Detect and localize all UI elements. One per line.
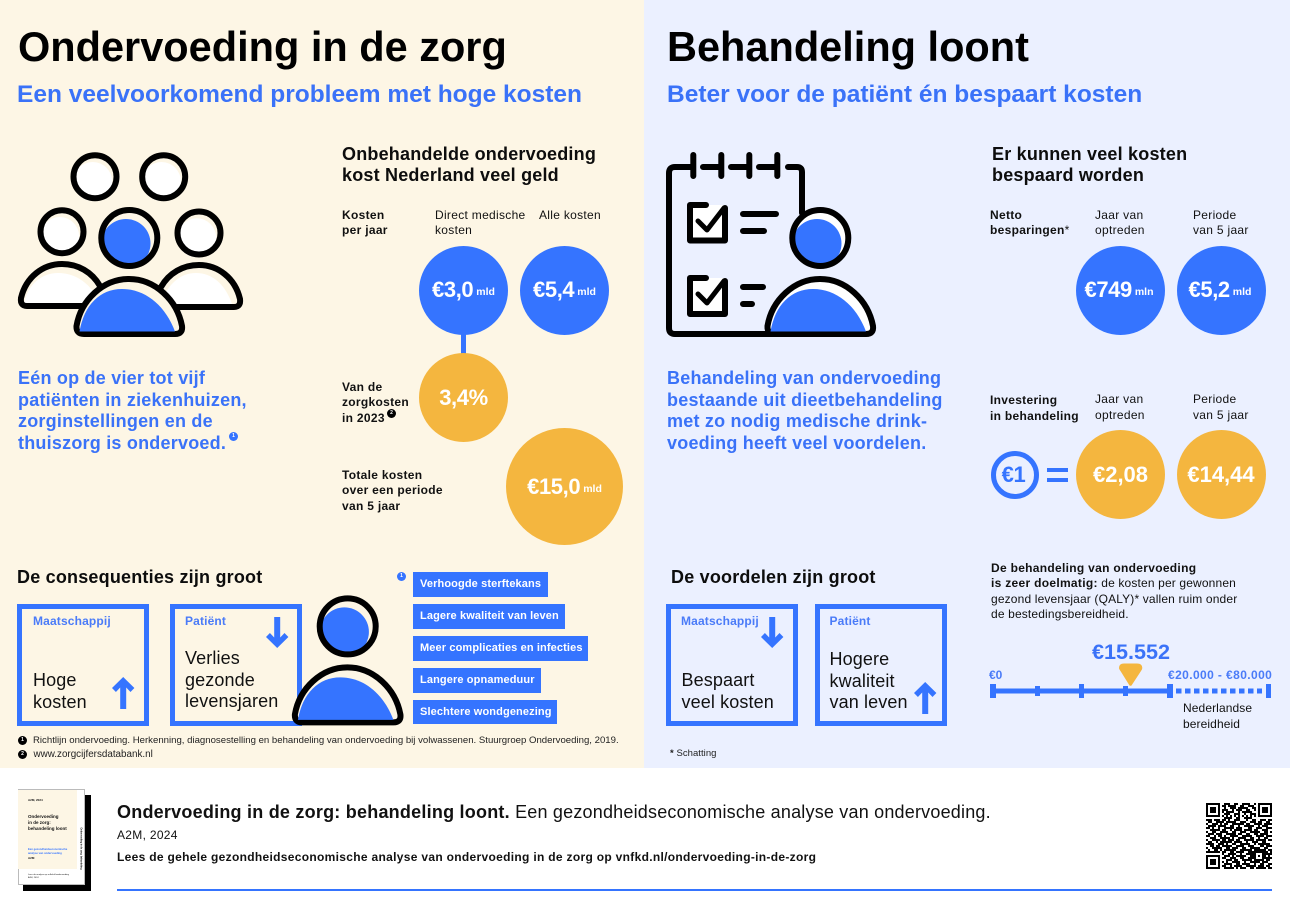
label: totale kosten: van 5 jaar [342,499,400,513]
footnote marker 1 [229,432,238,441]
bubble: 5,4 mld [520,246,609,335]
report cover: Een gezondheidseconomische [28,848,67,851]
card: maatschappij right [666,604,798,726]
footnote marker 1 at tags [397,572,406,581]
label: totale kosten [342,468,443,513]
label: van de zorgkosten: zorgkosten [342,395,409,409]
label: kosten per jaar: per jaar [342,223,388,237]
connector [461,330,466,358]
title: right: Behandeling loont [667,23,1029,70]
bubble: 15,0 mld: mld [583,482,602,494]
label: periode van 5 jaar: van 5 jaar [1193,223,1249,237]
tag list: Meer complicaties en infecties [420,642,583,654]
icon: euro 1 [991,451,1039,499]
card: patiënt right: Hogere [830,649,889,669]
text: left lead paragraph: Eén op de vier tot vijf [18,368,205,388]
bubble: 14,44: €14,44 [1187,462,1255,486]
label: van de zorgkosten [342,380,409,425]
icon: euro 1: €1 [1002,462,1025,487]
scale chart: bereidheid [1183,717,1240,731]
card: maatschappij left: kosten [33,692,87,712]
bubble: 5,2 mld [1176,246,1266,335]
icon: group of people [18,152,244,337]
label: totale kosten: Totale kosten [342,468,422,482]
heading: besparing: Er kunnen veel kosten [992,144,1187,164]
heading: besparing: bespaard worden [992,165,1144,185]
tag list: Verhoogde sterftekans [420,578,541,590]
footnotes left: 2 [21,751,24,757]
bubble: 5,4 mld: mld [577,286,596,298]
scale chart: €20.000 - €80.000 [1168,668,1272,682]
card: patiënt left: Verlies [185,648,240,668]
footnotes left: www.zorgcijfersdatabank.nl [34,749,153,760]
label: direct medische kosten [435,208,526,237]
text: right lead paragraph: Behandeling van ondervoeding [667,368,941,388]
text: doelmatig: de bestedingsbereidheid. [991,607,1129,621]
text: left lead paragraph: thuiszorg is ondervoed. [18,433,226,453]
bubble: 3,4% [419,353,508,442]
label: totale kosten: over een periode [342,483,443,497]
label: periode 2: Periode [1193,392,1236,406]
report cover: Ondervoeding [28,814,59,819]
card: patiënt left: Patiënt [185,614,226,628]
label: periode van 5 jaar [1193,208,1249,237]
bubble: 5,2 mld: mld [1233,286,1251,298]
report cover: Ondervoeding in de zorg: behandeling [80,828,82,869]
card: maatschappij right: Bespaart [682,670,755,690]
label: netto besparingen [990,208,1070,237]
icon: equals [1047,468,1068,482]
footer source: A2M, 2024 [117,828,178,842]
footer rule [117,889,1272,891]
report cover: A2M, 2024 [28,798,43,802]
bubble: 749 mln [1076,246,1165,335]
icon: checklist with person [666,152,876,337]
footnote marker 2 [387,409,396,418]
label: van de zorgkosten: in 2023 [342,411,385,425]
report cover: in de zorg: [28,820,51,825]
label: kosten per jaar: Kosten [342,208,384,222]
label: direct medische kosten: Direct medische [435,208,526,222]
bubble: 3,0 mld: mld [476,286,495,298]
label: periode 2: van 5 jaar [1193,408,1249,422]
bubble: 14,44 [1176,430,1266,519]
heading: besparing [992,144,1187,185]
footnote: schatting: * Schatting [670,748,716,759]
footnote marker 2: 2 [390,410,393,416]
bubble: 5,4 mld: €5,4 [533,277,574,302]
text: left lead paragraph: patiënten in ziekenhuizen, [18,390,247,410]
report cover: Lees de analyse op vnfkd.nl/ondervoeding [28,874,69,876]
card: patiënt right [815,604,947,726]
label: jaar van optreden: Jaar van [1095,208,1143,222]
icon: patient [292,595,404,726]
bubble: 15,0 mld [506,428,623,545]
footnote marker 1: 1 [232,433,235,439]
report cover: behandeling loont [28,826,67,831]
tag list: Lagere kwaliteit van leven [420,610,559,622]
label: van de zorgkosten: Van de [342,380,382,394]
label: jaar van optreden 2: optreden [1095,408,1145,422]
subtitle: left: Een veelvoorkomend probleem met hoge kosten [17,81,582,108]
label: periode van 5 jaar: Periode [1193,208,1236,222]
scale chart: Nederlandse [1183,701,1252,715]
bubble: 3,4%: 3,4% [439,384,488,410]
scale chart [989,639,1272,731]
tag list: Slechtere wondgenezing [420,706,552,718]
scale chart: €15.552 [1092,639,1170,664]
label: jaar van optreden: optreden [1095,223,1145,237]
text: right lead paragraph: bestaande uit dieetbehandeling [667,390,943,410]
heading: voordelen: De voordelen zijn groot [671,567,876,587]
text: left lead paragraph: zorginstellingen en de [18,411,213,431]
footnote marker 1 at tags: 1 [400,573,403,579]
label: jaar van optreden 2 [1095,392,1145,422]
card: patiënt right: Patiënt [830,614,871,628]
card: maatschappij left: Maatschappij [33,614,111,628]
bubble: 5,2 mld: €5,2 [1189,277,1230,302]
heading: costs: kost Nederland veel geld [342,165,559,185]
report cover [18,789,91,891]
label: kosten per jaar [342,208,388,237]
card: patiënt left: levensjaren [185,691,278,711]
bubble: 2,08: €2,08 [1093,462,1148,486]
text: doelmatig: De behandeling van ondervoeding [991,561,1196,575]
bubble: 2,08 [1076,430,1165,519]
panel: footer [0,768,1290,902]
bubble: 749 mln: mln [1135,286,1154,298]
card: patiënt right: van leven [830,692,908,712]
report cover: analyse van ondervoeding [28,852,62,854]
card: patiënt left: gezonde [185,670,255,690]
text: doelmatig: gezond levensjaar (QALY)* vallen ruim onder [991,592,1237,606]
label: periode 2 [1193,392,1249,422]
footnotes left: Richtlijn ondervoeding. Herkenning, diagnosestelling en behandeling van ondervoeding bij volwassenen. Stuurgroep Ondervoeding, 2019. [33,735,619,746]
heading: consequenties: De consequenties zijn groot [17,567,262,587]
footnotes left [18,735,619,760]
label: alle kosten: Alle kosten [539,208,601,222]
bubble: 3,0 mld [419,246,508,335]
tag list [413,572,588,724]
card: maatschappij left: Hoge [33,670,77,690]
text: right lead paragraph: voeding heeft veel voordelen. [667,433,926,453]
label: investering [990,393,1079,423]
label: netto besparingen: besparingen* [990,223,1070,237]
label: jaar van optreden [1095,208,1145,237]
card: patiënt left [170,604,302,726]
QR code [1206,803,1272,869]
card: maatschappij right: Maatschappij [681,614,759,628]
label: netto besparingen: Netto [990,208,1022,222]
title: left: Ondervoeding in de zorg [18,23,507,70]
text: left lead paragraph [18,368,247,453]
footnotes left: 1 [21,737,24,743]
tag list: Langere opnameduur [420,674,535,686]
panel: left background [0,0,644,768]
label: investering: in behandeling [990,409,1079,423]
heading: costs [342,144,596,185]
panel: right background [644,0,1290,768]
label: jaar van optreden 2: Jaar van [1095,392,1143,406]
card: maatschappij right: veel kosten [682,692,774,712]
bubble: 3,0 mld: €3,0 [432,277,473,302]
label: direct medische kosten: kosten [435,223,472,237]
card: maatschappij left [17,604,149,726]
label: investering: Investering [990,393,1057,407]
card: patiënt right: kwaliteit [830,671,895,691]
heading: costs: Onbehandelde ondervoeding [342,144,596,164]
bubble: 749 mln: €749 [1084,277,1132,302]
scale chart: €0 [989,668,1002,682]
subtitle: right: Beter voor de patiënt én bespaart kosten [667,81,1142,108]
footer title: Ondervoeding in de zorg: behandeling loont. Een gezondheidseconomische analyse van ondervoeding. [117,802,991,822]
text: right lead paragraph: met zo nodig medische drink- [667,411,927,431]
text: doelmatig: is zeer doelmatig: de kosten per gewonnen [991,576,1236,590]
text: doelmatig [991,561,1238,621]
report cover: A2M [28,856,34,860]
report cover: A2M, 2024 [28,877,39,879]
bubble: 15,0 mld: €15,0 [527,474,580,498]
text: right lead paragraph [667,368,943,453]
footer link: Lees de gehele gezondheidseconomische analyse van ondervoeding in de zorg op vnfkd.nl/ondervoeding-in-de-zorg [117,850,816,864]
